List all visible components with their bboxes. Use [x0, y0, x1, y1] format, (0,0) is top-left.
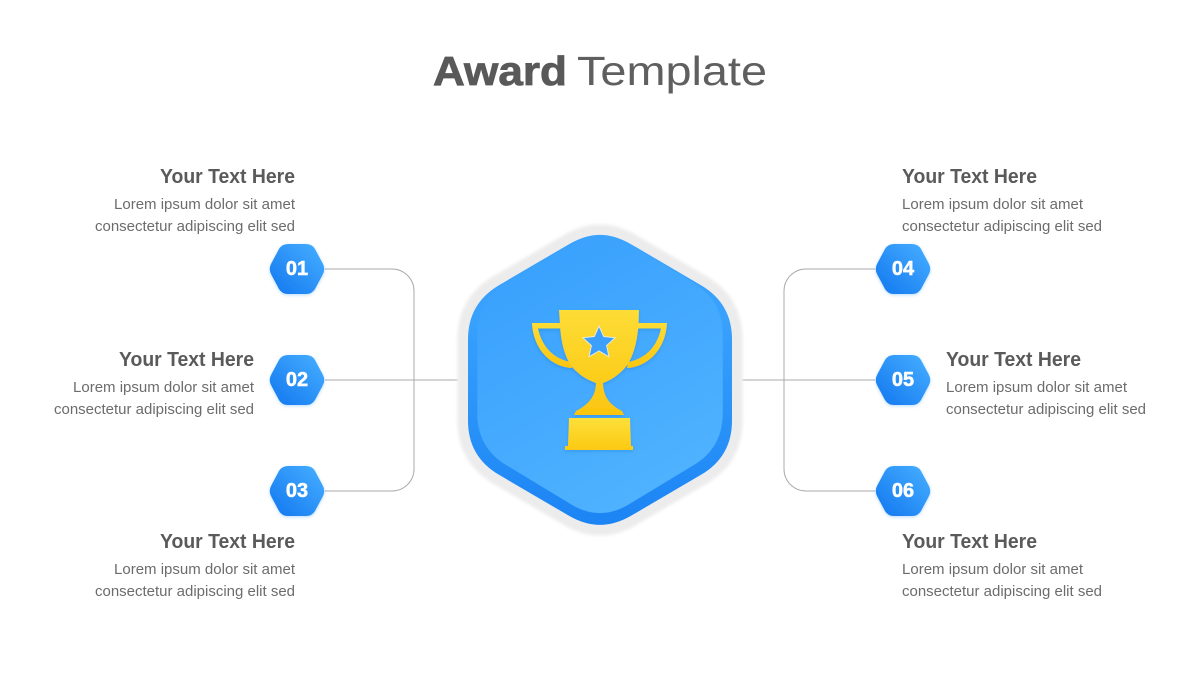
text block 02 — [54, 349, 254, 418]
text block 03: Lorem ipsum dolor sit amet — [114, 562, 295, 578]
text block 02: Your Text Here — [119, 349, 254, 371]
text block 03: Your Text Here — [160, 531, 295, 553]
text block 01: Your Text Here — [160, 166, 295, 188]
text block 05 — [946, 349, 1146, 418]
hexagon inner face — [477, 235, 723, 513]
text block 01: consectetur adipiscing elit sed — [95, 219, 295, 235]
text block 04: Lorem ipsum dolor sit amet — [902, 197, 1083, 213]
text block 03 — [95, 531, 295, 600]
badge 01 — [270, 244, 324, 294]
title: Award — [433, 48, 567, 94]
badge 02 — [270, 355, 324, 405]
icon: star — [583, 326, 615, 357]
text block 01 — [95, 166, 295, 235]
text block 06: Your Text Here — [902, 531, 1037, 553]
text block 05: Your Text Here — [946, 349, 1081, 371]
text block 05: Lorem ipsum dolor sit amet — [946, 380, 1127, 396]
text block 01: Lorem ipsum dolor sit amet — [114, 197, 295, 213]
text block 02: consectetur adipiscing elit sed — [54, 402, 254, 418]
text block 06: Lorem ipsum dolor sit amet — [902, 562, 1083, 578]
text block 02: Lorem ipsum dolor sit amet — [73, 380, 254, 396]
badge 05: 05 — [892, 369, 914, 391]
connector lines: right bracket — [742, 269, 875, 491]
badge 04: 04 — [892, 258, 915, 280]
badge 06 — [876, 466, 930, 516]
title: Template — [577, 48, 767, 94]
badge 03 — [270, 466, 324, 516]
text block 03: consectetur adipiscing elit sed — [95, 584, 295, 600]
central hexagon badge — [468, 235, 732, 525]
icon: trophy — [532, 310, 667, 450]
hexagon base — [468, 235, 732, 525]
badge 04 — [876, 244, 930, 294]
badge 03: 03 — [286, 480, 308, 502]
text block 04: Your Text Here — [902, 166, 1037, 188]
text block 06 — [902, 531, 1102, 600]
hexagon halo — [468, 235, 732, 525]
badge 05 — [876, 355, 930, 405]
badge 06: 06 — [892, 480, 914, 502]
text block 06: consectetur adipiscing elit sed — [902, 584, 1102, 600]
badge 01: 01 — [286, 258, 308, 280]
badge 02: 02 — [286, 369, 308, 391]
connector lines: left bracket — [325, 269, 458, 491]
text block 05: consectetur adipiscing elit sed — [946, 402, 1146, 418]
title — [433, 48, 767, 94]
text block 04: consectetur adipiscing elit sed — [902, 219, 1102, 235]
text block 04 — [902, 166, 1102, 235]
